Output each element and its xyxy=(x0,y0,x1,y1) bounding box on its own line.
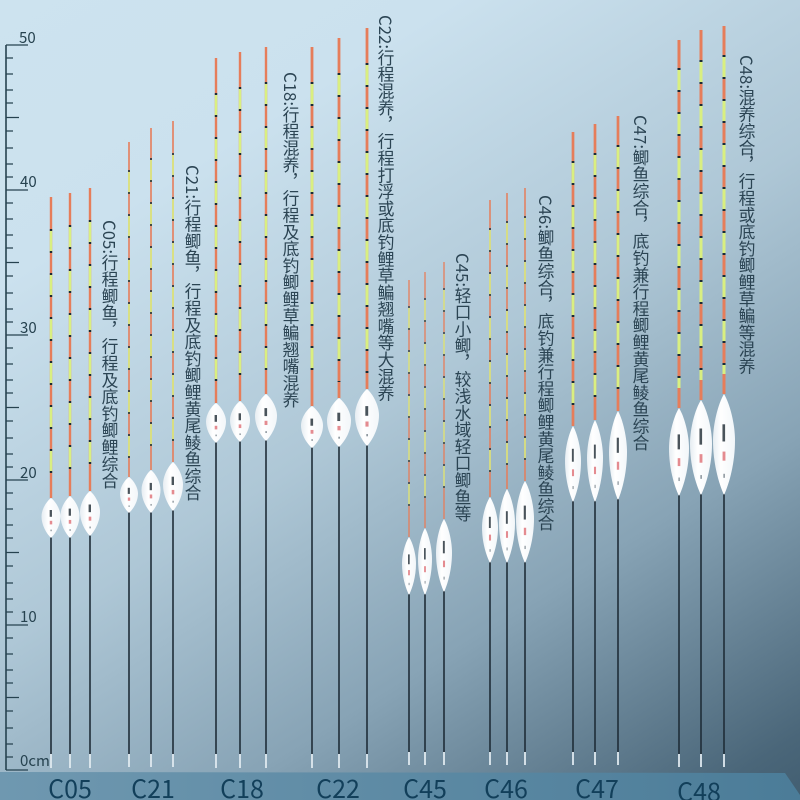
ruler scale xyxy=(6,27,50,771)
text: C18 description: C18:行程混养，行程及底钓鲫鲤草鳊翘嘴混养 xyxy=(279,72,303,408)
float group C05 xyxy=(42,188,100,768)
float group C47 xyxy=(565,116,627,765)
ruler scale: 0cm xyxy=(20,750,50,771)
text: C22 description: C22:行程混养，行程打浮或底钓鲤草鳊翘嘴等大混养 xyxy=(374,15,398,402)
text: C45 description: C45:轻口小鲫，较浅水域轻口鲫鱼等 xyxy=(451,253,475,522)
ruler scale: 20 xyxy=(20,462,37,483)
text: C05 description: C05:行程鲫鱼，行程及底钓鲫鲤综合 xyxy=(98,220,122,489)
text: C46 description: C46:鲫鱼综合，底钓兼行程鲫鲤黄尾鲮鱼综合 xyxy=(534,195,558,531)
text: C21 description: C21:行程鲫鱼，行程及底钓鲫鲤黄尾鲮鱼综合 xyxy=(181,165,205,501)
ruler scale: 10 xyxy=(20,606,37,627)
float group C18 xyxy=(206,47,277,768)
text: C48 description: C48:混养综合，行程或底钓鲫鲤草鳊等混养 xyxy=(735,55,759,374)
ruler scale: 50 xyxy=(19,27,36,48)
float group C21 xyxy=(120,121,183,767)
bottom label band xyxy=(0,772,800,800)
float group C48 xyxy=(669,26,735,767)
text: C47 description: C47:鲫鱼综合，底钓兼行程鲫鲤黄尾鲮鱼综合 xyxy=(629,115,653,451)
ruler scale: 30 xyxy=(20,317,37,338)
model labels xyxy=(48,770,721,800)
float group C45 xyxy=(402,262,452,765)
float group C22 xyxy=(301,28,379,768)
float group C46 xyxy=(482,188,534,765)
ruler scale: 40 xyxy=(20,171,37,192)
